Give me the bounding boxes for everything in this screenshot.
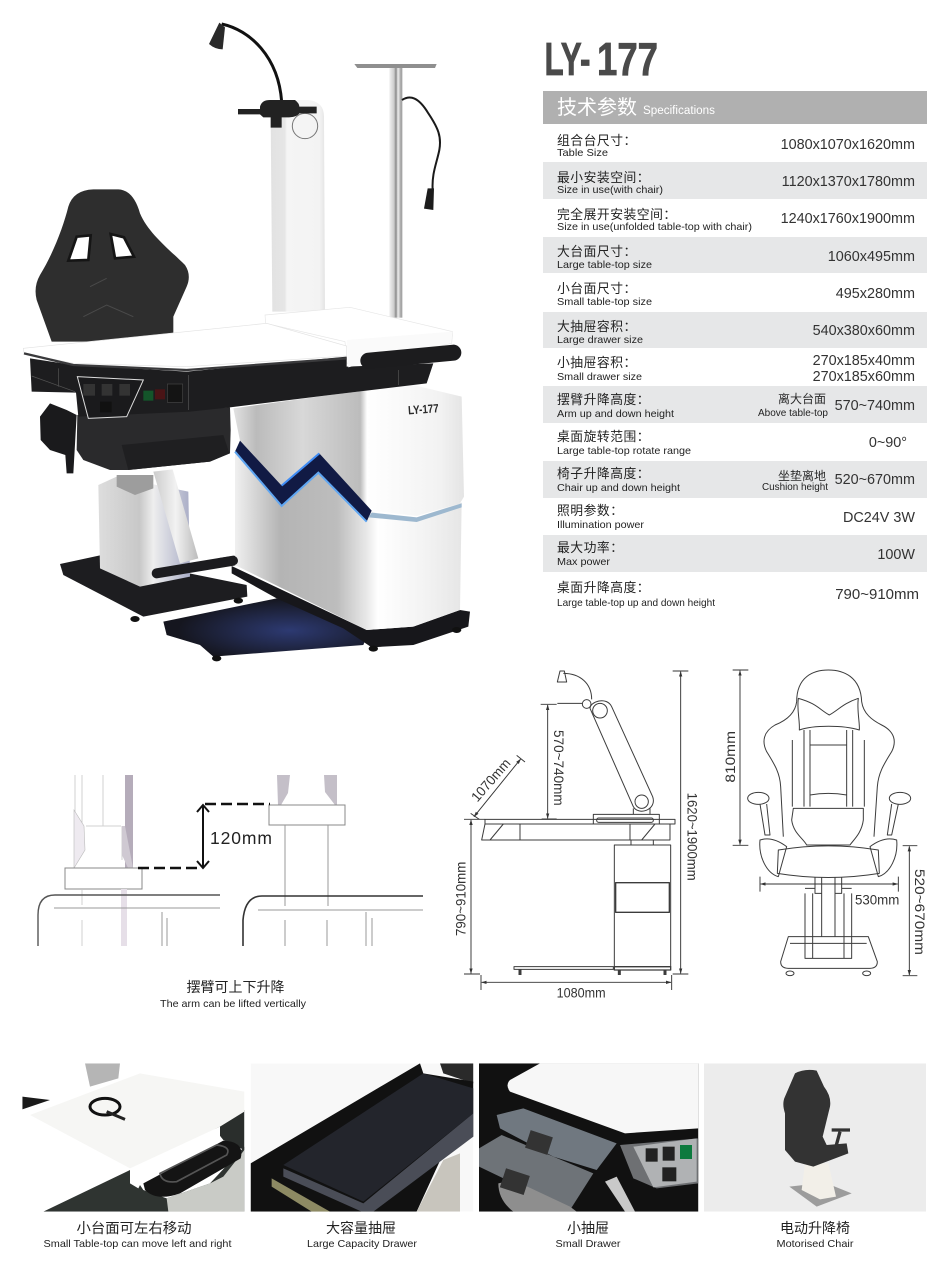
row: unfolded size: 完全展开安装空间：: [557, 207, 677, 222]
row: unfolded size: 1240x1760x1900mm: [781, 211, 915, 227]
caption: Small Drawer: [556, 1238, 621, 1250]
feature: large drawer: [251, 1063, 473, 1250]
row: arm height: 离大台面: [778, 391, 826, 406]
chair lift post: [117, 475, 153, 495]
row: small table-top: 小台面尺寸：: [557, 281, 637, 296]
row: chair height: 520~670mm: [835, 472, 915, 488]
row: small table-top: Small table-top size: [557, 297, 652, 308]
outlet: [167, 384, 183, 402]
control panel: [77, 377, 143, 418]
row: rotate range: [557, 429, 907, 457]
cabinet lower: [235, 452, 462, 630]
seat height dimension: [903, 846, 927, 976]
row: chair height: [557, 466, 915, 494]
caption: [776, 1220, 854, 1250]
feature: motorised chair: [704, 1063, 926, 1250]
row: table-top height: 桌面升降高度：: [557, 580, 650, 595]
photo: [479, 1063, 698, 1212]
row: max power: Max power: [557, 557, 611, 568]
row: small drawer: 270x185x40mm: [813, 353, 915, 369]
row: large drawer: Large drawer size: [557, 335, 643, 346]
foot plate with blue glow: [163, 598, 367, 657]
row: arm height: Arm up and down height: [557, 409, 674, 420]
row: small table-top: [557, 281, 915, 308]
header english: Specifications: [643, 105, 715, 117]
specifications table: [543, 91, 927, 609]
photo: [251, 1063, 473, 1212]
row: unfolded size: [557, 207, 915, 233]
chair pedestal: [98, 477, 190, 587]
row: size in use: 1120x1370x1780mm: [782, 174, 915, 190]
row: small drawer: Small drawer size: [557, 372, 642, 383]
sliding tray handle: [368, 353, 453, 361]
caption: Large Capacity Drawer: [307, 1238, 418, 1250]
arm lift caption: 摆臂可上下升降: [186, 979, 284, 995]
row: max power: 100W: [877, 547, 915, 563]
row: table-top height: Large table-top up and down height: [557, 598, 715, 609]
column: [271, 100, 325, 312]
row: large drawer: 大抽屉容积：: [557, 319, 637, 334]
table height dimension: 790~910mm: [454, 862, 469, 936]
row: arm height: Above table-top: [758, 408, 828, 419]
arm lift diagram: [38, 775, 423, 1010]
row: small drawer: 270x185x60mm: [813, 369, 915, 385]
row: large table-top: Large table-top size: [557, 260, 652, 271]
row: illumination: [557, 503, 915, 531]
row: large table-top: 1060x495mm: [828, 249, 915, 265]
seat width dimension: 530mm: [855, 892, 899, 907]
row: arm height: 570~740mm: [835, 398, 915, 414]
total height dimension: [673, 671, 699, 974]
row: table size: [557, 133, 915, 159]
large table-top: [23, 323, 347, 367]
caption: 大容量抽屉: [326, 1220, 396, 1236]
photo: [22, 1063, 244, 1212]
pole shaft: [389, 65, 403, 318]
row: illumination: DC24V 3W: [843, 510, 915, 526]
caption: [307, 1220, 418, 1250]
row: rotate range: 0~90°: [869, 435, 907, 451]
small table-top: [265, 307, 453, 363]
seat mechanism: [40, 403, 77, 473]
caption: 小台面可左右移动: [76, 1220, 192, 1236]
right arm position: [243, 775, 423, 946]
width dimension: [481, 975, 672, 1001]
caption: [44, 1220, 232, 1250]
small table-top front: [347, 332, 453, 367]
row: large table-top: [557, 244, 915, 271]
seat cushion: [77, 407, 231, 470]
product illustration: table unit with chair: [23, 23, 470, 661]
row: max power: 最大功率：: [557, 540, 623, 555]
slanted support: [153, 469, 198, 563]
chair backrest: [36, 189, 189, 342]
total height dimension: 1620~1900mm: [684, 793, 699, 881]
back height dimension: [723, 670, 748, 845]
zebra row stripes: [543, 162, 927, 572]
row: unfolded size: Size in use(unfolded table-top with chair): [557, 222, 752, 233]
zigzag dark band: [235, 441, 372, 522]
table body and cabinet: [23, 323, 470, 661]
arm lift caption: The arm can be lifted vertically: [160, 998, 307, 1010]
row: table size: 组合台尺寸：: [557, 133, 637, 148]
row: rotate range: 桌面旋转范围：: [557, 429, 650, 444]
caption: [556, 1220, 621, 1250]
row: chair height: Chair up and down height: [557, 483, 680, 494]
caption: 电动升降椅: [780, 1220, 850, 1236]
cabinet upper: [233, 385, 464, 516]
table outline: [482, 671, 675, 975]
foot rest tip over cabinet: [220, 561, 233, 563]
dimension drawing: table: [454, 671, 699, 1001]
row: small table-top: 495x280mm: [836, 286, 915, 302]
row: illumination: 照明参数：: [557, 503, 623, 518]
lift value: 120mm: [210, 828, 272, 848]
header chinese: 技术参数: [557, 96, 637, 119]
foot rest: [157, 561, 233, 573]
blue light strips: [235, 452, 367, 522]
chair feet: [130, 616, 140, 622]
chair outline: [748, 670, 911, 976]
plug: [424, 188, 434, 210]
caption: Motorised Chair: [776, 1238, 854, 1250]
table underside: [30, 357, 433, 417]
chair base: [60, 555, 247, 617]
feature: sliding small table-top: [22, 1063, 244, 1250]
lift arrow: [197, 805, 209, 868]
product title: [544, 33, 658, 85]
red switch: [155, 389, 165, 399]
instrument pole: [354, 64, 440, 318]
row: table-top height: 790~910mm: [835, 586, 919, 603]
row: table size: 1080x1070x1620mm: [781, 137, 915, 153]
width dimension: 1080mm: [557, 986, 606, 1001]
seat width dimension: [760, 877, 899, 907]
dimension drawing: chair: [723, 670, 927, 976]
lamp head: [209, 23, 225, 49]
depth dimension: 1070mm: [468, 756, 513, 805]
table header: [543, 91, 927, 124]
arm height dimension: [541, 704, 566, 819]
row: large drawer: [557, 319, 915, 346]
cabinet base: [232, 566, 470, 647]
row: small drawer: 小抽屉容积：: [557, 355, 637, 370]
caption: 小抽屉: [567, 1220, 609, 1236]
cable: [402, 98, 440, 190]
row: large drawer: 540x380x60mm: [813, 323, 915, 339]
row: max power: [557, 540, 915, 568]
row: table-top height: [557, 580, 919, 609]
panel buttons: [83, 384, 95, 396]
row: table size: Table Size: [557, 148, 608, 159]
gooseneck: [222, 24, 282, 102]
row: size in use: Size in use(with chair): [557, 185, 663, 196]
row: rotate range: Large table-top rotate range: [557, 446, 691, 457]
row: large table-top: 大台面尺寸：: [557, 244, 637, 259]
caption: Small Table-top can move left and right: [44, 1238, 232, 1250]
back height dimension: 810mm: [723, 731, 738, 783]
row: size in use: [557, 170, 915, 196]
panel border: [77, 377, 143, 418]
drawer lines: [32, 368, 398, 410]
top plate: [354, 64, 437, 68]
product title: LY-: [544, 33, 590, 85]
cabinet blue belt: [368, 503, 462, 522]
row: chair height: 坐垫离地: [778, 468, 826, 483]
row: small drawer: [557, 353, 915, 385]
row: arm height: [557, 391, 915, 420]
row: illumination: Illumination power: [557, 520, 645, 531]
arm height dimension: 570~740mm: [551, 730, 566, 806]
lamp and arm column: [209, 23, 325, 312]
row: chair height: Cushion height: [762, 482, 828, 493]
row: chair height: 椅子升降高度：: [557, 466, 650, 481]
depth dimension: [468, 755, 525, 819]
cabinet model label: LY-177: [408, 401, 439, 417]
feature: small drawer: [479, 1063, 698, 1250]
green switch: [143, 391, 153, 401]
seat height dimension: 520~670mm: [912, 869, 927, 955]
row: arm height: 摆臂升降高度：: [557, 392, 650, 407]
product title: 177: [597, 33, 658, 85]
ring: [292, 113, 318, 139]
dashed guide lines: [138, 804, 270, 868]
arm bar: [238, 100, 317, 128]
table height dimension: [454, 819, 485, 974]
photo: [704, 1063, 926, 1212]
left arm position: [38, 775, 220, 946]
row: size in use: 最小安装空间：: [557, 170, 650, 185]
arm lift caption: [160, 979, 307, 1010]
